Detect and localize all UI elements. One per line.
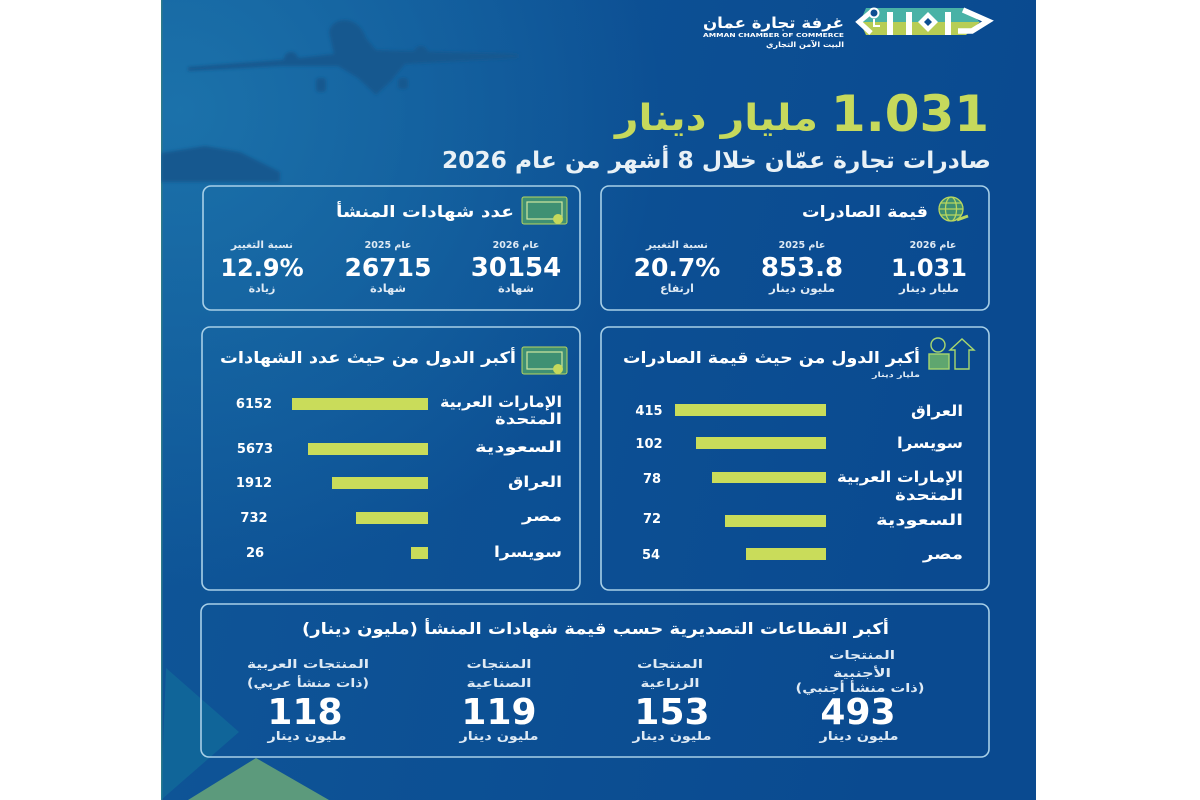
sector: industrial products: الصناعية <box>466 676 532 690</box>
row: Saudi Arabia <box>643 511 963 529</box>
row: UAE: المتحدة <box>895 486 963 504</box>
stat: 2025: عام 2025 <box>779 240 825 251</box>
sector: industrial products: 119 <box>461 692 537 733</box>
stat: 2026: شهادة <box>498 282 534 295</box>
icon: certificate <box>522 347 567 374</box>
row: Iraq: 1912 <box>236 476 272 491</box>
sector: agricultural products: الزراعية <box>640 676 700 690</box>
row: UAE: المتحدة <box>495 410 562 428</box>
sector: agricultural products: المنتجات <box>637 657 703 671</box>
sector: foreign products: مليون دينار <box>818 729 898 744</box>
sector: foreign products: الأجنبية <box>833 665 891 680</box>
heading: أكبر القطاعات التصديرية حسب قيمة شهادات المنشأ (مليون دينار) <box>302 618 889 638</box>
row: Switzerland: سويسرا <box>897 434 963 452</box>
stat: 2026 <box>471 240 561 295</box>
title: headline value <box>613 85 989 143</box>
row: Switzerland: 102 <box>635 437 663 452</box>
stat: change: زيادة <box>249 282 275 295</box>
sector: Arab products: المنتجات العربية <box>247 657 369 671</box>
row: Iraq <box>635 402 963 420</box>
row: Saudi Arabia: 72 <box>643 512 661 527</box>
row: Switzerland: 26 <box>246 546 264 561</box>
row: UAE <box>643 468 963 504</box>
stat: change: 20.7% <box>634 253 720 282</box>
subtitle: صادرات تجارة عمّان خلال 8 أشهر من عام 2026 <box>442 144 991 174</box>
row: UAE <box>236 393 562 428</box>
stat: 2025: 26715 <box>345 253 431 282</box>
logo mark <box>859 8 988 35</box>
stat: 2026: مليار دينار <box>898 282 959 295</box>
sector: agricultural products: مليون دينار <box>631 729 712 744</box>
sector: foreign products: (ذات منشأ أجنبي) <box>796 680 924 695</box>
sector: industrial products: المنتجات <box>466 657 532 671</box>
row: Egypt: مصر <box>521 507 562 525</box>
icon: globe <box>939 197 968 221</box>
sector: Arab products: مليون دينار <box>266 729 346 744</box>
row: Iraq <box>236 473 562 491</box>
row: Saudi Arabia <box>237 438 562 457</box>
stat: 2026 <box>891 240 967 295</box>
row: Egypt: 54 <box>642 548 660 563</box>
stat: change: ارتفاع <box>660 282 694 295</box>
unit note: مليار دينار <box>871 370 920 379</box>
heading: أكبر الدول من حيث قيمة الصادرات <box>623 347 920 367</box>
row: UAE: 6152 <box>236 397 272 412</box>
row: UAE: 78 <box>643 472 661 487</box>
headline unit: مليار دينار <box>613 98 818 139</box>
logo: Amman Chamber of Commerce <box>703 8 988 49</box>
stat: change: نسبة التغيير <box>645 240 708 251</box>
stat: 2025 <box>345 240 431 295</box>
stat: change: نسبة التغيير <box>230 240 293 251</box>
row: UAE: الإمارات العربية <box>440 393 562 411</box>
bar chart: certificates <box>236 393 562 561</box>
stat: 2025 <box>761 240 843 295</box>
icon: coins and arrow <box>929 338 974 369</box>
stat: 2025: شهادة <box>370 282 406 295</box>
sector: foreign products: 493 <box>820 692 896 733</box>
stat: change <box>634 240 720 295</box>
panel: top countries by certificates <box>202 327 580 590</box>
sector: industrial products <box>458 657 538 744</box>
stat: 2026: عام 2026 <box>493 240 539 251</box>
row: Iraq: 415 <box>635 404 663 419</box>
row: Egypt <box>240 507 562 526</box>
panel: certificates count <box>203 186 580 310</box>
row: Saudi Arabia: 5673 <box>237 442 273 457</box>
row: Egypt: مصر <box>922 545 963 563</box>
mountain silhouette <box>161 146 280 182</box>
row: Iraq: العراق <box>508 473 562 491</box>
airplane silhouette <box>188 20 518 95</box>
stat: 2025: 853.8 <box>761 253 843 283</box>
row: Saudi Arabia: السعودية <box>876 511 963 529</box>
sector: agricultural products <box>631 657 712 744</box>
panel: export value <box>601 186 989 310</box>
stat: 2026: 30154 <box>471 253 561 283</box>
panel: top export sectors <box>201 604 989 757</box>
bar chart: export value <box>635 402 963 563</box>
background panel <box>161 0 1036 800</box>
row: Iraq: العراق <box>911 402 963 420</box>
logo English name: AMMAN CHAMBER OF COMMERCE <box>703 33 844 39</box>
heading: أكبر الدول من حيث عدد الشهادات <box>220 347 516 367</box>
sector: foreign products: المنتجات <box>829 648 895 662</box>
stat: change <box>220 240 304 295</box>
sector: foreign products <box>796 648 924 744</box>
stat: 2025: مليون دينار <box>768 282 835 295</box>
logo Arabic name: غرفة تجارة عمان <box>703 14 844 32</box>
heading: عدد شهادات المنشأ <box>336 201 514 221</box>
stat: 2025: عام 2025 <box>365 240 411 251</box>
sector: Arab products: 118 <box>267 692 343 733</box>
heading: قيمة الصادرات <box>802 202 928 221</box>
row: Switzerland <box>635 434 963 452</box>
row: Switzerland: سويسرا <box>494 543 562 561</box>
row: Saudi Arabia: السعودية <box>475 438 562 456</box>
row: Egypt <box>642 545 963 563</box>
stat: 2026: عام 2026 <box>910 240 956 251</box>
sector: Arab products <box>247 657 369 744</box>
row: UAE: الإمارات العربية <box>837 468 963 486</box>
sector: agricultural products: 153 <box>634 692 710 733</box>
panel: top countries by export value <box>601 327 989 590</box>
sector: Arab products: (ذات منشأ عربي) <box>247 675 369 690</box>
logo slogan: البيت الآمن التجاري <box>766 40 844 49</box>
sector: industrial products: مليون دينار <box>458 729 538 744</box>
icon: certificate <box>522 197 567 224</box>
row: Egypt: 732 <box>240 511 268 526</box>
headline number: 1.031 <box>831 85 989 143</box>
stat: change: 12.9% <box>220 254 304 282</box>
stat: 2026: 1.031 <box>891 254 967 282</box>
row: Switzerland <box>246 543 562 561</box>
